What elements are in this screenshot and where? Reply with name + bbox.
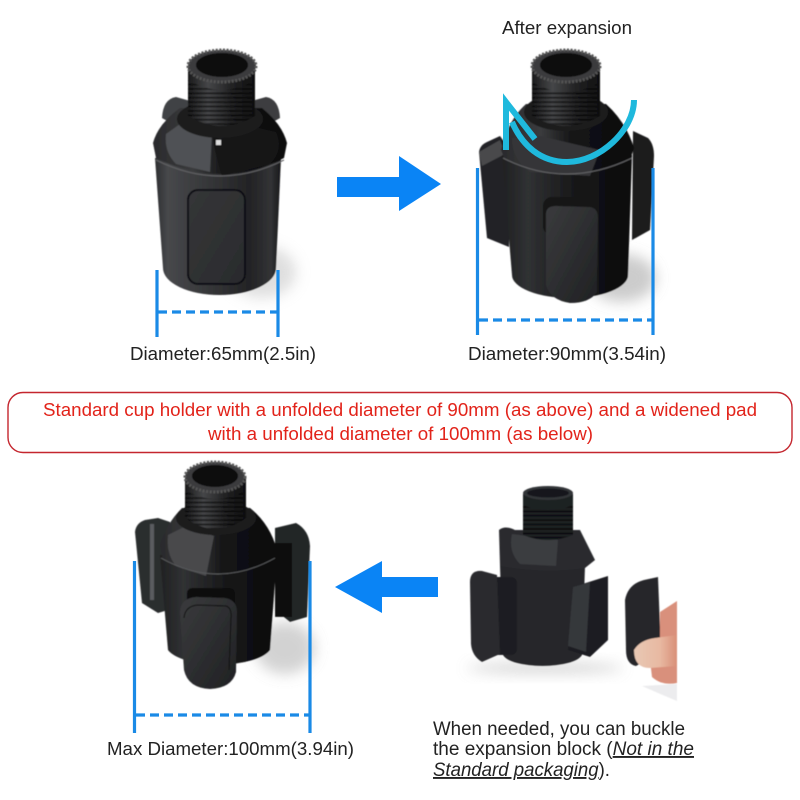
product photo: max diameter holder — [135, 462, 315, 689]
icon: cyan rotation arrow — [506, 100, 634, 162]
text block: expansion note: the expansion block (Not in the — [433, 739, 694, 760]
product photo: holder with expansion blocks and hand — [467, 486, 677, 701]
callout: red rounded note: with a unfolded diameter of 100mm (as below) — [207, 424, 593, 444]
dimension: 65mm — [157, 270, 278, 337]
label: diameter 65mm: Diameter:65mm(2.5in) — [130, 343, 316, 364]
product photo: collapsed holder — [153, 50, 296, 298]
arrow: right — [337, 156, 441, 211]
arrow: left — [335, 561, 438, 613]
product photo: expanded holder — [479, 50, 656, 303]
text block: expansion note: When needed, you can buckle — [433, 719, 685, 740]
text block: expansion note: Standard packaging). — [433, 760, 610, 781]
label: diameter 90mm: Diameter:90mm(3.54in) — [468, 343, 666, 364]
dimension: 90mm — [478, 168, 653, 335]
callout: red rounded note: Standard cup holder with a unfolded diameter of 90mm (as above) and a widened pad — [43, 400, 757, 420]
callout: red rounded note — [8, 392, 792, 452]
text block: expansion note — [433, 719, 694, 781]
heading: after expansion: After expansion — [502, 17, 632, 38]
dimension: 100mm — [134, 561, 310, 733]
label: max diameter 100mm: Max Diameter:100mm(3.94in) — [107, 738, 354, 759]
